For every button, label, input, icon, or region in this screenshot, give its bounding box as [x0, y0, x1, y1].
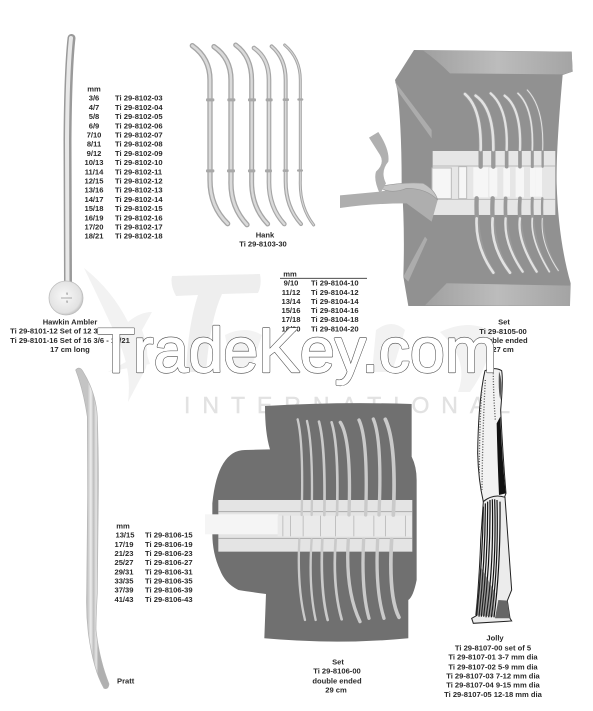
caption: Jolly — [444, 634, 543, 699]
table: Hawkin Ambler sizes: 9/12 — [87, 149, 101, 158]
roll top fold — [423, 51, 573, 74]
table: set sizes: 11/12 — [282, 288, 300, 297]
table: Pratt sizes: 17/19 — [114, 540, 134, 549]
roll body — [212, 403, 417, 642]
caption: Hawkin Ambler: Ti 29-8101-16 Set of 16 3/6 - 18/21 — [10, 336, 131, 345]
table: Hawkin Ambler sizes: Ti 29-8102-06 — [115, 121, 163, 130]
watermark: faded logo — [84, 268, 510, 418]
table: Hawkin Ambler sizes: 5/8 — [89, 112, 99, 121]
caption: Hawkin Ambler: Hawkin Ambler — [43, 318, 97, 327]
caption: Hawkin Ambler: Ti 29-8101-12 Set of 12 3/6 - 14/17 — [10, 327, 130, 336]
instrument: Jolly dilator — [472, 369, 512, 623]
caption: Jolly: Ti 29-8107-03 7-12 mm dia — [446, 672, 541, 681]
watermark: faded logo: INTERNATIONAL — [184, 392, 510, 418]
table: set sizes: Ti 29-8104-10 — [311, 279, 359, 288]
instrument roll: set 27 cm — [340, 50, 573, 306]
table: Hawkin Ambler sizes: Ti 29-8102-10 — [115, 158, 163, 167]
caption: set 27 cm: Ti 29-8105-00 — [479, 327, 527, 336]
table: Pratt sizes: mm — [116, 522, 130, 531]
caption: Jolly: Jolly — [486, 634, 504, 643]
caption: set 27 cm: Set — [498, 318, 510, 327]
caption: set 29 cm: Set — [332, 658, 344, 667]
caption: Hank: Ti 29-8103-30 — [239, 240, 287, 249]
caption: Hank — [239, 231, 287, 249]
table: Pratt sizes: Ti 29-8106-31 — [145, 567, 193, 576]
instrument: Hawkin Ambler probe: 9 — [66, 291, 69, 296]
table: Hawkin Ambler sizes: 4/7 — [89, 103, 99, 112]
caption: set 29 cm: Ti 29-8106-00 — [313, 667, 361, 676]
table: Hawkin Ambler sizes: 7/10 — [87, 130, 101, 140]
table: set sizes: Ti 29-8104-18 — [311, 315, 359, 324]
table: Pratt sizes: Ti 29-8106-39 — [145, 586, 193, 595]
table: set sizes — [280, 270, 367, 333]
table: Pratt sizes: Ti 29-8106-27 — [145, 558, 193, 567]
table: set sizes: mm — [283, 270, 297, 279]
table: Hawkin Ambler sizes: Ti 29-8102-12 — [115, 176, 163, 186]
table: Pratt sizes: Ti 29-8106-15 — [145, 531, 193, 540]
table: Pratt sizes: 33/35 — [114, 576, 134, 586]
roll body — [395, 50, 573, 306]
table: Hawkin Ambler sizes: 15/18 — [84, 204, 104, 213]
table: Pratt sizes: 13/15 — [115, 531, 135, 540]
table: Hawkin Ambler sizes: 13/16 — [84, 186, 104, 195]
dilators in roll — [465, 90, 558, 273]
table: Hawkin Ambler sizes: 8/11 — [87, 140, 102, 149]
table: set sizes: 9/10 — [284, 279, 298, 288]
caption: Hank: Hank — [256, 231, 275, 240]
table: set sizes: Ti 29-8104-12 — [311, 288, 359, 297]
table: Hawkin Ambler sizes: 16/19 — [84, 213, 104, 222]
table: Hawkin Ambler sizes: Ti 29-8102-13 — [115, 186, 163, 195]
table: Hawkin Ambler sizes: 18/21 — [84, 232, 104, 241]
caption: set 27 cm: double ended — [478, 336, 528, 345]
watermark: TradeKey outline text: TradeKey.com — [97, 316, 497, 386]
strap — [205, 514, 278, 534]
caption: Hawkin Ambler: 17 cm long — [50, 345, 90, 354]
instrument: Hank dilators — [192, 45, 314, 225]
table: Hawkin Ambler sizes: Ti 29-8102-08 — [115, 140, 163, 149]
table: Hawkin Ambler sizes: 11/14 — [85, 167, 104, 176]
table: Pratt sizes: 21/23 — [114, 549, 134, 558]
table: Pratt sizes: 25/27 — [114, 558, 134, 567]
table: Hawkin Ambler sizes: Ti 29-8102-17 — [115, 222, 163, 232]
table: Hawkin Ambler sizes: Ti 29-8102-09 — [115, 149, 163, 158]
elastic band — [433, 151, 555, 215]
table: Hawkin Ambler sizes: Ti 29-8102-14 — [115, 195, 163, 204]
caption: set 29 cm: double ended — [312, 677, 362, 686]
caption: set 29 cm: 29 cm — [325, 686, 347, 695]
dilators in roll — [298, 419, 399, 622]
caption: Jolly: Ti 29-8107-04 9-15 mm dia — [446, 681, 541, 690]
table: Pratt sizes: 29/31 — [114, 567, 134, 576]
table: Pratt sizes: 37/39 — [114, 586, 134, 595]
table: Hawkin Ambler sizes: 3/6 — [89, 94, 99, 103]
table: set sizes: 15/16 — [281, 306, 301, 315]
table: set sizes: Ti 29-8104-16 — [311, 306, 359, 315]
table: Pratt sizes: Ti 29-8106-19 — [145, 540, 193, 549]
instrument roll: set 29 cm — [205, 403, 417, 642]
table: Hawkin Ambler sizes: Ti 29-8102-18 — [115, 232, 163, 241]
table: Hawkin Ambler sizes: Ti 29-8102-04 — [115, 103, 163, 112]
caption: Jolly: Ti 29-8107-01 3-7 mm dia — [448, 653, 538, 662]
table: set sizes: 13/14 — [281, 297, 301, 306]
caption: set 27 cm: 27 cm — [492, 345, 514, 354]
table: Hawkin Ambler sizes: 12/15 — [84, 176, 104, 186]
table: Pratt sizes: Ti 29-8106-35 — [145, 576, 193, 586]
table: Hawkin Ambler sizes: Ti 29-8102-11 — [115, 167, 163, 176]
table: Pratt sizes: 41/43 — [114, 595, 134, 604]
caption: set 27 cm — [478, 318, 528, 354]
watermark: TradeKey outline text: TradeKey.com — [97, 316, 497, 386]
instrument: Hawkin Ambler probe: 9 — [66, 299, 69, 304]
table: Pratt sizes: Ti 29-8106-23 — [145, 549, 193, 558]
table: Hawkin Ambler sizes: Ti 29-8102-07 — [115, 130, 163, 140]
table: Hawkin Ambler sizes: 14/17 — [84, 195, 104, 204]
table: Hawkin Ambler sizes: 6/9 — [89, 121, 99, 130]
table: Hawkin Ambler sizes — [84, 84, 163, 241]
caption: Jolly: Ti 29-8107-05 12-18 mm dia — [444, 690, 543, 699]
table: set sizes: Ti 29-8104-14 — [311, 297, 359, 306]
roll bottom fold — [425, 283, 570, 306]
caption: Jolly: Ti 29-8107-02 5-9 mm dia — [448, 662, 538, 671]
table: Hawkin Ambler sizes: Ti 29-8102-03 — [115, 94, 163, 103]
table: Pratt sizes: Ti 29-8106-43 — [145, 595, 193, 604]
caption: Pratt: Pratt — [117, 677, 135, 686]
table: Hawkin Ambler sizes: Ti 29-8102-16 — [115, 213, 163, 222]
table: Hawkin Ambler sizes: 17/20 — [84, 222, 104, 232]
tie strings — [340, 183, 438, 222]
table: Pratt sizes — [114, 522, 193, 604]
table: Hawkin Ambler sizes: 10/13 — [84, 158, 104, 167]
table: set sizes: 18/20 — [281, 324, 301, 333]
table: Hawkin Ambler sizes: Ti 29-8102-05 — [115, 112, 163, 121]
instrument: Hawkin Ambler probe — [49, 38, 83, 315]
caption: Hawkin Ambler — [10, 318, 131, 354]
elastic band — [218, 500, 412, 552]
table: set sizes: 17/18 — [281, 315, 301, 324]
table: Hawkin Ambler sizes: mm — [87, 84, 101, 93]
instrument: Pratt dilator — [76, 368, 109, 689]
caption: Jolly: Ti 29-8107-00 set of 5 — [455, 643, 532, 652]
table: set sizes: Ti 29-8104-20 — [311, 324, 359, 333]
table: Hawkin Ambler sizes: Ti 29-8102-15 — [115, 204, 163, 213]
caption: set 29 cm — [312, 658, 362, 695]
